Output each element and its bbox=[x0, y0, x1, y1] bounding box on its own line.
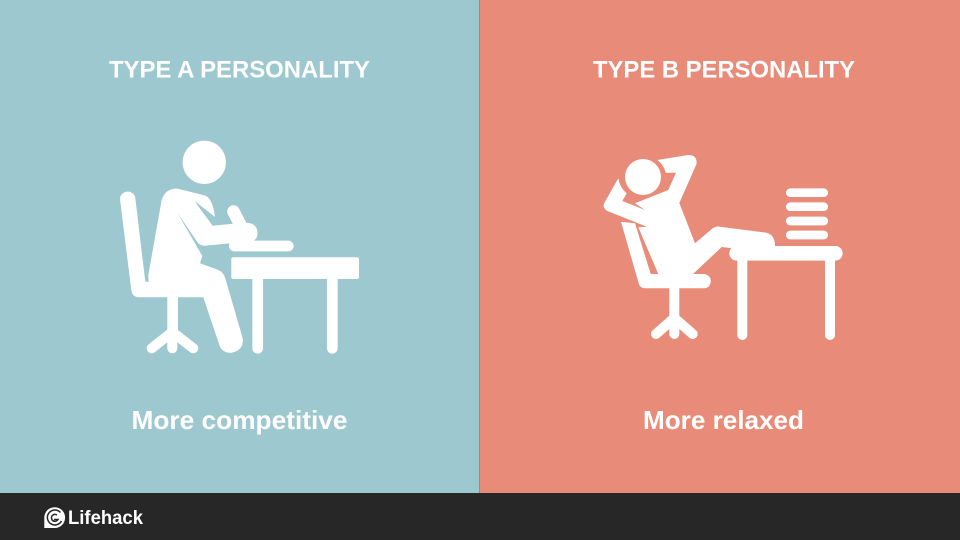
desk bbox=[231, 257, 359, 279]
stacked papers bbox=[790, 193, 824, 235]
pen bbox=[234, 212, 243, 230]
heading: type B personality: TYPE B PERSONALITY bbox=[593, 56, 855, 84]
chair base bbox=[669, 286, 679, 318]
footer bar bbox=[0, 493, 960, 540]
chair base bbox=[167, 295, 178, 332]
heading: type A personality: TYPE A PERSONALITY bbox=[109, 56, 370, 84]
head bbox=[625, 159, 661, 195]
divider bbox=[479, 0, 480, 493]
chair bbox=[120, 192, 155, 297]
caption: more relaxed: More relaxed bbox=[643, 405, 804, 435]
head bbox=[183, 141, 226, 184]
logo: Lifehack bbox=[44, 507, 143, 529]
desk bbox=[737, 246, 835, 261]
caption: more competitive: More competitive bbox=[132, 405, 348, 435]
wordmark: Lifehack bbox=[68, 508, 143, 529]
panel: type B bbox=[480, 0, 960, 493]
icon: person working at desk bbox=[120, 141, 359, 353]
paper bbox=[234, 241, 288, 251]
body bbox=[148, 189, 258, 353]
icon: person relaxing with feet on desk bbox=[604, 155, 835, 335]
body and chair bbox=[604, 155, 775, 288]
panel: type A bbox=[0, 0, 479, 493]
icon: Lifehack mark bbox=[44, 507, 65, 528]
